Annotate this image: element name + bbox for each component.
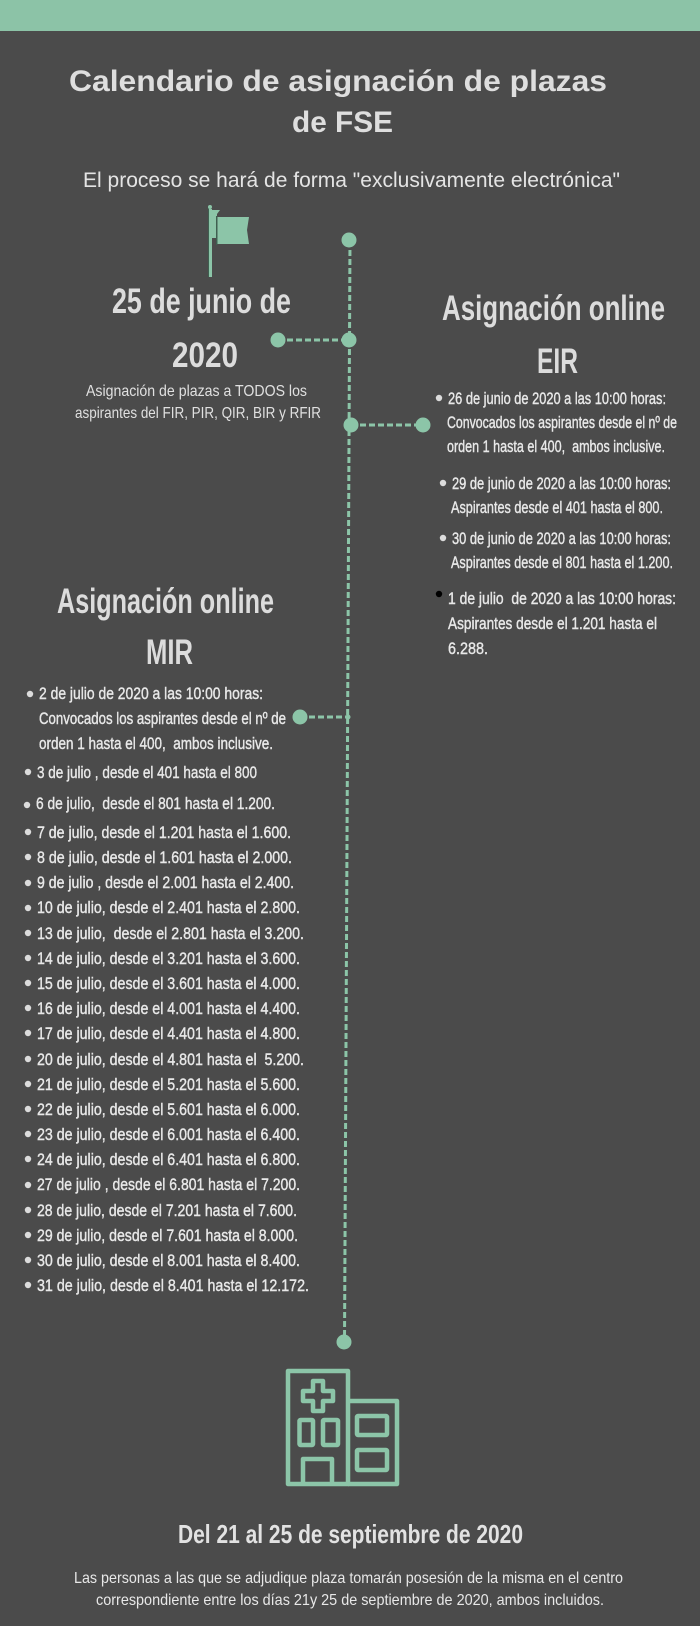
list item: 26 de junio (436, 390, 677, 456)
list item: 29 de julio: 29 de julio, desde el 7.601 hasta el 8.000. (37, 1227, 298, 1245)
heading: Asignación online MIR (57, 582, 274, 672)
timeline: connector to EIR (344, 418, 430, 432)
list item: 21 de julio: 21 de julio, desde el 5.201 hasta el 5.600. (37, 1076, 300, 1094)
timeline: end node (336, 1334, 352, 1350)
text: toma de posesión: correspondiente entre los días 21y 25 de septiembre de 2020, ambos incluidos. (96, 1592, 604, 1609)
heading: Asignación online MIR: Asignación online (57, 582, 274, 621)
list item: 30 de junio (440, 530, 673, 572)
list item: 1 de julio (436, 590, 676, 658)
heading: Asignación online EIR (442, 289, 665, 381)
heading: Asignación online MIR: MIR (146, 633, 193, 672)
list item: 8 de julio: 8 de julio, desde el 1.601 hasta el 2.000. (37, 849, 292, 867)
timeline: start node (342, 232, 356, 248)
list item: 16 de julio: 16 de julio, desde el 4.001 hasta el 4.400. (37, 1000, 300, 1018)
list item: 2 de julio: orden 1 hasta el 400, ambos inclusive. (39, 735, 273, 753)
timeline: vertical dashed line (344, 241, 350, 1342)
list item: 29 de junio (440, 475, 671, 517)
text: toma de posesión (74, 1570, 623, 1609)
list item: 14 de julio: 14 de julio, desde el 3.201 hasta el 3.600. (37, 950, 300, 968)
top band (0, 0, 700, 31)
icon: hospital (288, 1371, 397, 1484)
list item: 2 de julio (27, 685, 286, 753)
heading: Del 21 al 25 de septiembre de 2020: Del 21 al 25 de septiembre de 2020 (178, 1519, 523, 1549)
list item: 2 de julio: 2 de julio de 2020 a las 10:00 horas: (39, 685, 263, 703)
list item: 22 de julio: 22 de julio, desde el 5.601 hasta el 6.000. (37, 1101, 300, 1119)
heading: 25 de junio de 2020 (112, 282, 291, 375)
list item: 20 de julio: 20 de julio, desde el 4.801 hasta el 5.200. (37, 1051, 304, 1069)
panel: MIR (24, 582, 309, 1295)
list item: 2 de julio: Convocados los aspirantes desde el nº de (39, 710, 286, 728)
list item: 24 de julio: 24 de julio, desde el 6.401 hasta el 6.800. (37, 1151, 300, 1169)
list item: 9 de julio: 9 de julio , desde el 2.001 hasta el 2.400. (37, 874, 294, 892)
subtitle: El proceso se hará de forma "exclusivamente electrónica" (83, 169, 620, 192)
list item: 6 de julio: 6 de julio, desde el 801 hasta el 1.200. (36, 795, 275, 813)
list item: 1 de julio: Aspirantes desde el 1.201 hasta el (448, 615, 657, 633)
heading: 25 de junio de 2020: 2020 (172, 336, 238, 375)
icon: flag (208, 205, 249, 277)
list item: 10 de julio: 10 de julio, desde el 2.401 hasta el 2.800. (37, 899, 300, 917)
list item: 7 de julio: 7 de julio, desde el 1.201 hasta el 1.600. (37, 824, 291, 842)
list item: 30 de julio: 30 de julio, desde el 8.001 hasta el 8.400. (37, 1252, 300, 1270)
timeline: connector to MIR (292, 710, 350, 724)
text: asignación a todos (75, 383, 321, 422)
list item: 28 de julio: 28 de julio, desde el 7.201 hasta el 7.600. (37, 1202, 297, 1220)
heading: 25 de junio de 2020: 25 de junio de (112, 282, 291, 321)
text: toma de posesión: Las personas a las que se adjudique plaza tomarán posesión de la misma en el centro (74, 1570, 623, 1587)
panel: EIR (436, 289, 677, 658)
list item: 23 de julio: 23 de julio, desde el 6.001 hasta el 6.400. (37, 1126, 300, 1144)
list item: 17 de julio: 17 de julio, desde el 4.401 hasta el 4.800. (37, 1025, 300, 1043)
list item: 1 de julio: 6.288. (448, 640, 488, 658)
list item: 13 de julio: 13 de julio, desde el 2.801 hasta el 3.200. (37, 925, 304, 943)
heading: Asignación online EIR: EIR (537, 342, 578, 381)
title: de FSE (292, 106, 393, 139)
list item: 15 de julio: 15 de julio, desde el 3.601 hasta el 4.000. (37, 975, 300, 993)
list item: 27 de julio: 27 de julio , desde el 6.801 hasta el 7.200. (37, 1176, 300, 1194)
text: asignación a todos: aspirantes del FIR, PIR, QIR, BIR y RFIR (75, 405, 321, 422)
text: asignación a todos: Asignación de plazas a TODOS los (86, 383, 307, 400)
title (69, 65, 607, 139)
panel: 25 de junio (75, 282, 321, 422)
list item: 3 de julio: 3 de julio , desde el 401 hasta el 800 (37, 764, 257, 782)
timeline: connector to 25 de junio (270, 332, 356, 348)
title: Calendario de asignación de plazas (69, 65, 607, 98)
list item: 31 de julio: 31 de julio, desde el 8.401 hasta el 12.172. (37, 1277, 309, 1295)
